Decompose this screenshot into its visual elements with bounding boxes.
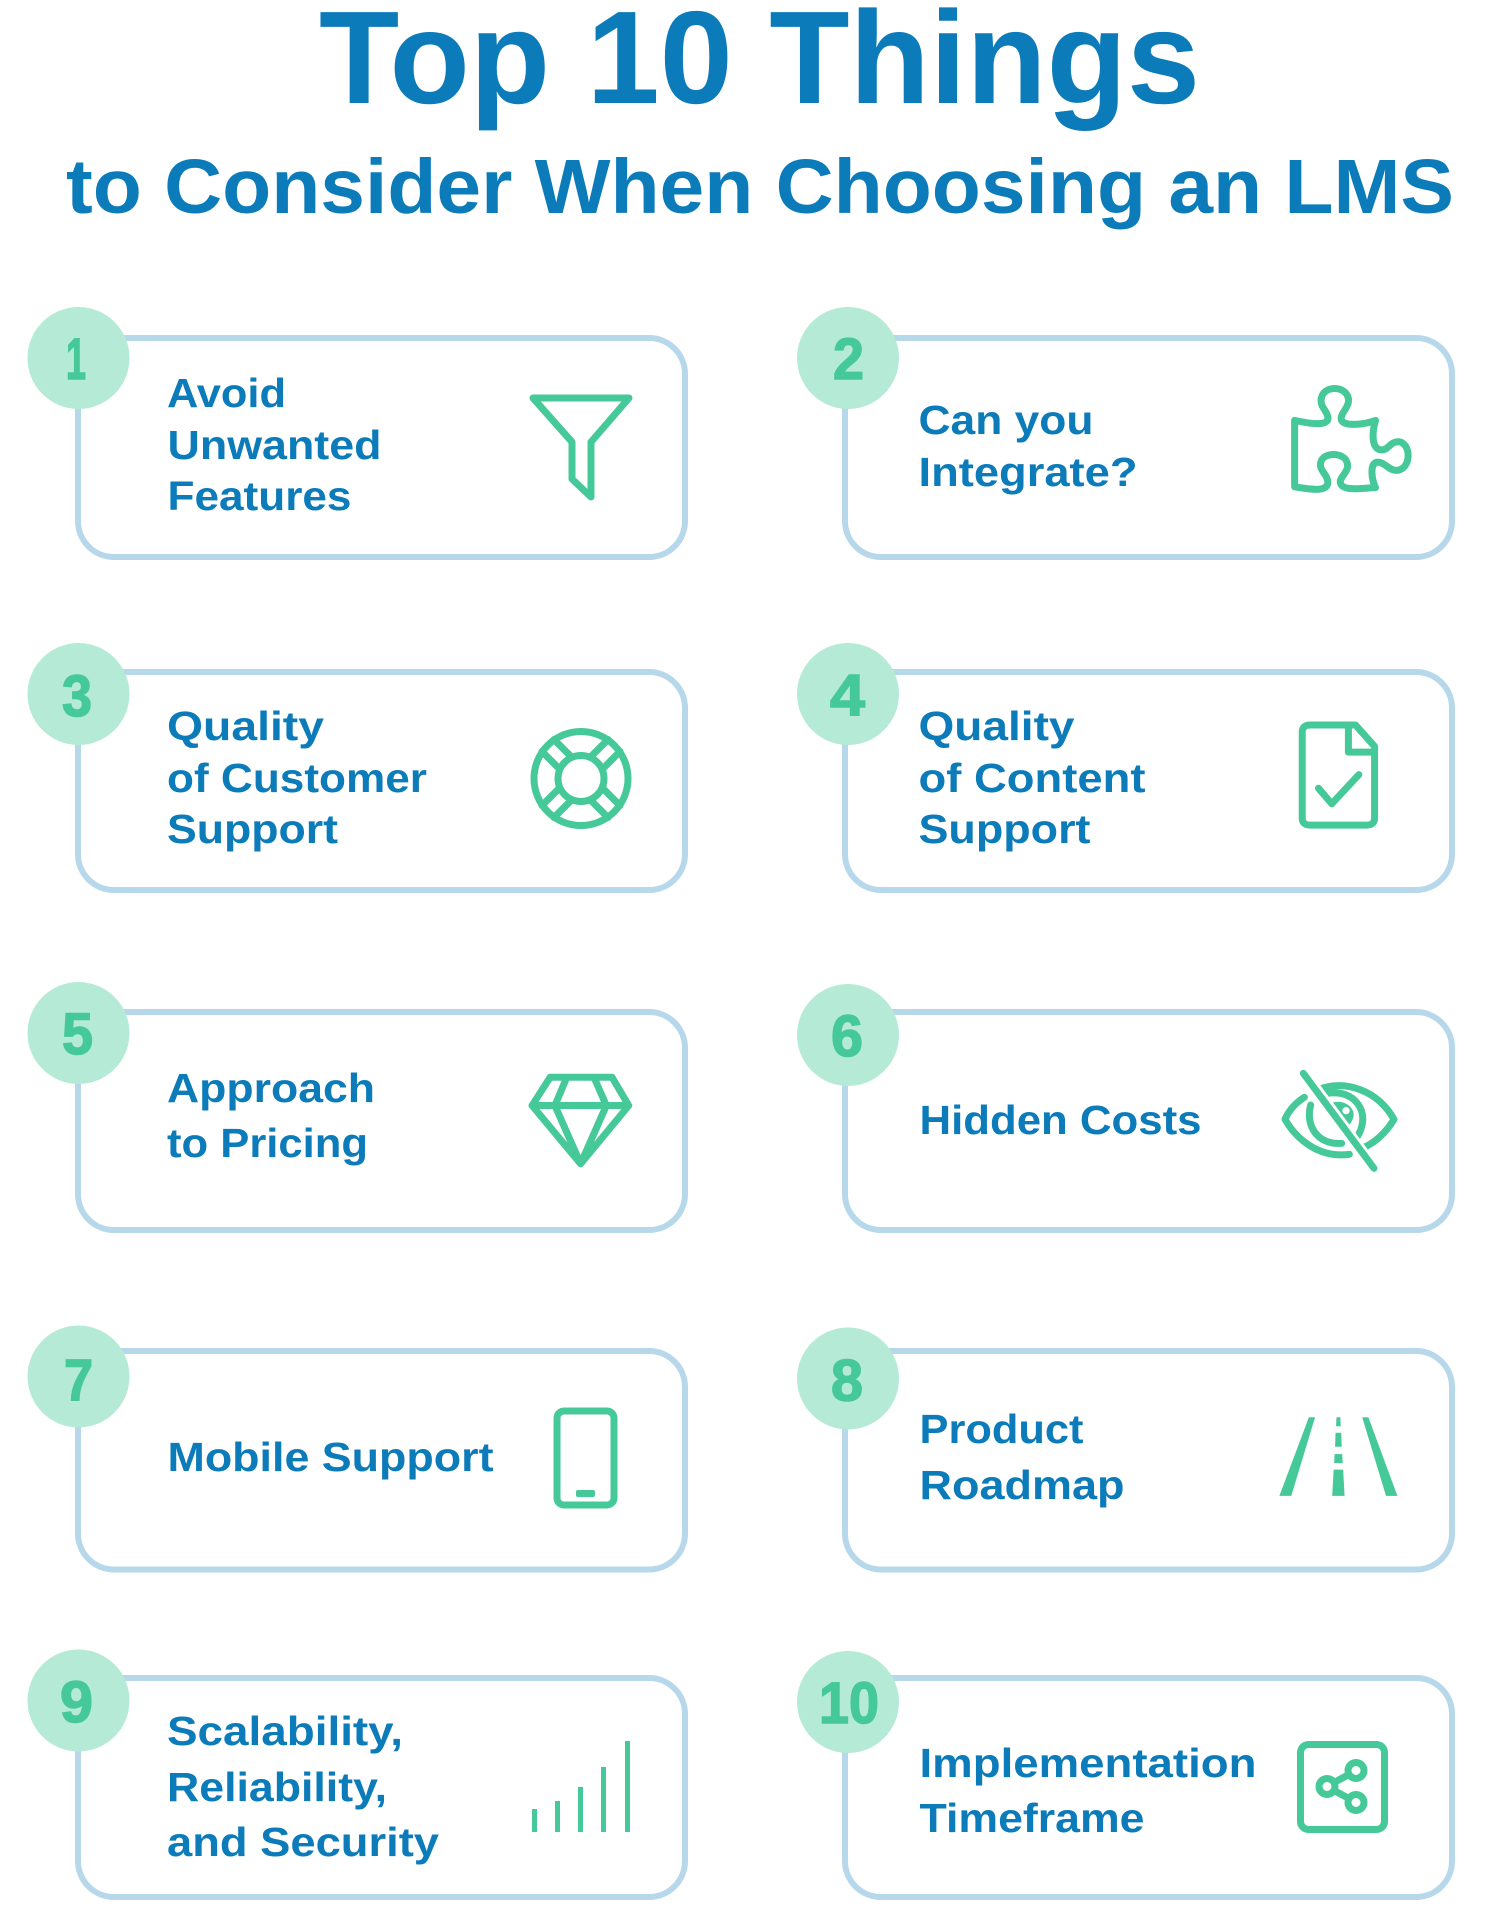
card 2 text [918,397,1138,495]
card 5 text: Approach [167,1065,375,1111]
card 4 text: of Content [918,755,1146,801]
card 4 text: Quality [918,703,1075,749]
subtitle: to Consider When Choosing an LMS [66,144,1454,230]
card 7 text: Mobile Support [168,1434,494,1480]
card 7: mobile support: 7 [64,1348,93,1413]
card 2: can you integrate [797,307,1452,557]
icon: document with check [1302,725,1375,825]
card 9 text: Reliability, [167,1764,387,1810]
card 10 text [920,1740,1256,1841]
card 1 text: Features [168,473,352,519]
card 8 text: Product [920,1406,1084,1452]
card 1 text: Unwanted [168,422,382,468]
icon: road [1279,1417,1397,1496]
card 2 text: Can you [918,397,1094,443]
card 8 text [920,1406,1124,1508]
card 2: can you integrate: 2 [833,327,864,392]
card 3 text [167,703,427,852]
card 8 text: Roadmap [920,1462,1124,1508]
card 9: scalability, reliability, and security: 9 [60,1670,93,1735]
icon: funnel [533,398,629,497]
icon: diamond [532,1077,629,1164]
card 6 text: Hidden Costs [920,1097,1202,1143]
card 4: quality of content support: 4 [830,663,865,728]
icon: signal bars [532,1741,630,1832]
card 6: hidden costs: 6 [831,1004,863,1069]
card 4 text: Support [918,806,1091,852]
card 10 text: Timeframe [920,1795,1144,1841]
card 3 text: Support [167,806,338,852]
card 7: mobile support [28,1326,685,1570]
icon: smartphone [557,1411,614,1505]
card 8: product roadmap [797,1328,1452,1570]
card 2 text: Integrate? [918,449,1138,495]
card 5: approach to pricing [28,982,685,1230]
icon: share network in a box [1300,1744,1384,1830]
card 1 text [167,370,382,519]
card 1: avoid unwanted features: 1 [66,327,86,392]
icon: puzzle piece [1295,389,1408,489]
card 9: scalability, reliability, and security [28,1650,685,1897]
card 9 text: Scalability, [167,1708,403,1754]
card 4 text [918,703,1146,852]
card 3 text: of Customer [167,755,427,801]
icon: crossed-out eye [1285,1073,1394,1168]
card 4: quality of content support [797,643,1452,890]
card 6: hidden costs [797,984,1452,1230]
card 1: avoid unwanted features [28,307,685,557]
card 9 text: and Security [167,1819,439,1865]
card 1 text: Avoid [167,370,286,416]
card 10: implementation timeframe: 10 [819,1671,879,1736]
card 3: quality of customer support: 3 [62,664,92,729]
card 5: approach to pricing: 5 [62,1002,93,1067]
card 8: product roadmap: 8 [831,1348,863,1414]
icon: lifebuoy [534,732,628,826]
card 10 text: Implementation [920,1740,1256,1786]
card 5 text: to Pricing [167,1120,368,1166]
card 9 text [167,1708,439,1865]
card 10: implementation timeframe [797,1651,1452,1897]
card 5 text [167,1065,375,1166]
card 3: quality of customer support [28,643,685,890]
card 3 text: Quality [167,703,324,749]
